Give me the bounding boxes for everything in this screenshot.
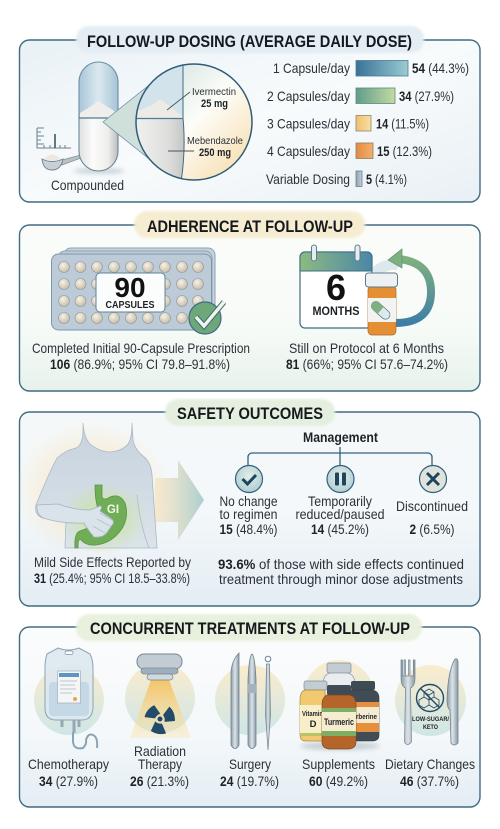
outcome: no change: 15 (48.4%) [220, 521, 278, 537]
icon: pill bottle [366, 273, 398, 335]
heading: adherence: ADHERENCE AT FOLLOW-UP [147, 217, 353, 236]
icon: capsule [73, 62, 125, 174]
item: supplements: Turmeric [324, 717, 354, 727]
label: compounded: Compounded [51, 177, 124, 193]
text: completed prescription: Completed Initial 90-Capsule Prescription [32, 340, 250, 356]
item: dietary changes: 46 (37.7%) [400, 773, 459, 789]
heading: concurrent treatments [76, 614, 422, 641]
arrow: gradient arrow to management [155, 460, 204, 540]
outcome: discontinued [396, 466, 468, 537]
item: surgery [215, 653, 285, 789]
heading: follow-up dosing: FOLLOW-UP DOSING (AVERAGE DAILY DOSE) [87, 32, 412, 51]
bar chart: capsules per day: Variable Dosing [266, 171, 350, 187]
item: radiation therapy: Radiation [134, 743, 186, 759]
item: dietary changes: LOW-SUGAR/ [412, 716, 449, 723]
item: dietary changes [385, 659, 475, 789]
heading: safety outcomes: SAFETY OUTCOMES [177, 404, 323, 423]
item: supplements [300, 660, 380, 789]
item: dietary changes: Dietary Changes [385, 756, 475, 772]
label: mebendazole: 250 mg [199, 147, 231, 159]
bar chart: capsules per day: 2 Capsules/day [267, 88, 350, 104]
icon: calendar: 6 [326, 267, 346, 308]
icon: cycle arrow [372, 249, 431, 323]
text: still on protocol: Still on Protocol at 6 Months [289, 340, 444, 356]
bar chart: capsules per day: 1 Capsule/day [273, 60, 350, 76]
panel: follow-up dosing [20, 26, 480, 202]
heading: follow-up dosing [76, 26, 424, 53]
outcome: discontinued: 2 (6.5%) [410, 521, 454, 537]
bar chart: capsules per day [266, 60, 469, 187]
magnified capsule view [103, 60, 252, 182]
outcome: temporarily reduced: 14 (45.2%) [311, 521, 369, 537]
illustration: torso with GI stomach: GI [107, 504, 119, 516]
label: ivermectin: 25 mg [201, 98, 228, 110]
item: supplements: Supplements [302, 756, 375, 772]
heading: management tree [248, 429, 432, 465]
item: surgery: Surgery [229, 756, 271, 772]
icon: blister pack: 90 [114, 272, 146, 303]
item: dietary changes: KETO [423, 724, 438, 731]
text: mild side effects [34, 554, 191, 586]
panel: safety outcomes [14, 399, 480, 606]
text: completed prescription [32, 340, 250, 372]
text: continued treatment summary [218, 556, 464, 587]
outcome: no change: No change [220, 493, 278, 509]
icon: measuring spoon [42, 154, 81, 170]
label: ivermectin: Ivermectin [192, 86, 236, 98]
text: completed prescription: 106 (86.9%; 95% CI 79.8–91.8%) [50, 356, 230, 372]
icon: green check badge [189, 302, 224, 334]
label: mebendazole [187, 135, 243, 159]
outcome: temporarily reduced: reduced/paused [296, 506, 384, 522]
item: chemotherapy: Chemotherapy [28, 756, 109, 772]
bar chart: capsules per day: 4 Capsules/day [267, 143, 350, 159]
text: still on protocol [286, 340, 448, 372]
outcome: temporarily reduced: Temporarily [308, 493, 372, 509]
bar chart: capsules per day: 34 (27.9%) [399, 88, 454, 104]
outcome: no change [220, 466, 278, 537]
heading: concurrent treatments: CONCURRENT TREATMENTS AT FOLLOW-UP [90, 619, 410, 638]
item: chemotherapy: 34 (27.9%) [39, 773, 98, 789]
icon: blister pack: CAPSULES [106, 299, 154, 311]
label: mebendazole: Mebendazole [187, 135, 243, 147]
panel: concurrent treatments [20, 614, 480, 807]
item: radiation therapy: Therapy [138, 756, 182, 772]
outcome: discontinued: Discontinued [396, 498, 468, 514]
item: radiation therapy [125, 654, 195, 789]
icon: calendar [300, 245, 372, 328]
icon: measuring scale [37, 128, 71, 148]
outcome: temporarily reduced [296, 466, 384, 537]
item: supplements: 60 (49.2%) [309, 773, 368, 789]
text: still on protocol: 81 (66%; 95% CI 57.6–74.2%) [286, 356, 448, 372]
bar chart: capsules per day: 5 (4.1%) [366, 171, 407, 187]
item: supplements: rberine [356, 712, 377, 721]
item: radiation therapy: 26 (21.3%) [130, 773, 189, 789]
bar chart: capsules per day: 15 (12.3%) [377, 143, 432, 159]
heading: safety outcomes [165, 399, 335, 426]
icon: calendar: MONTHS [312, 306, 360, 318]
heading: adherence [134, 211, 365, 238]
label: ivermectin [192, 86, 236, 110]
outcome: no change: to regimen [220, 506, 278, 522]
item: supplements: Vitamin [302, 709, 323, 718]
panel: adherence at follow-up [20, 211, 480, 391]
bar chart: capsules per day: 14 (11.5%) [376, 116, 429, 132]
item: chemotherapy [28, 648, 109, 789]
bar chart: capsules per day: 54 (44.3%) [412, 60, 469, 76]
text: mild side effects: 31 (25.4%; 95% CI 18.5–33.8%) [34, 570, 190, 586]
text: mild side effects: Mild Side Effects Reported by [34, 554, 191, 570]
illustration: torso with GI stomach [14, 422, 170, 558]
item: supplements: D [310, 719, 317, 730]
bar chart: capsules per day: 3 Capsules/day [267, 116, 350, 132]
icon: blister pack [52, 248, 215, 330]
text: continued treatment summary: 93.6% of those with side effects continued [218, 556, 464, 572]
text: continued treatment summary: treatment through minor dose adjustments [219, 571, 463, 587]
heading: management tree: Management [303, 429, 378, 445]
item: surgery: 24 (19.7%) [220, 773, 279, 789]
